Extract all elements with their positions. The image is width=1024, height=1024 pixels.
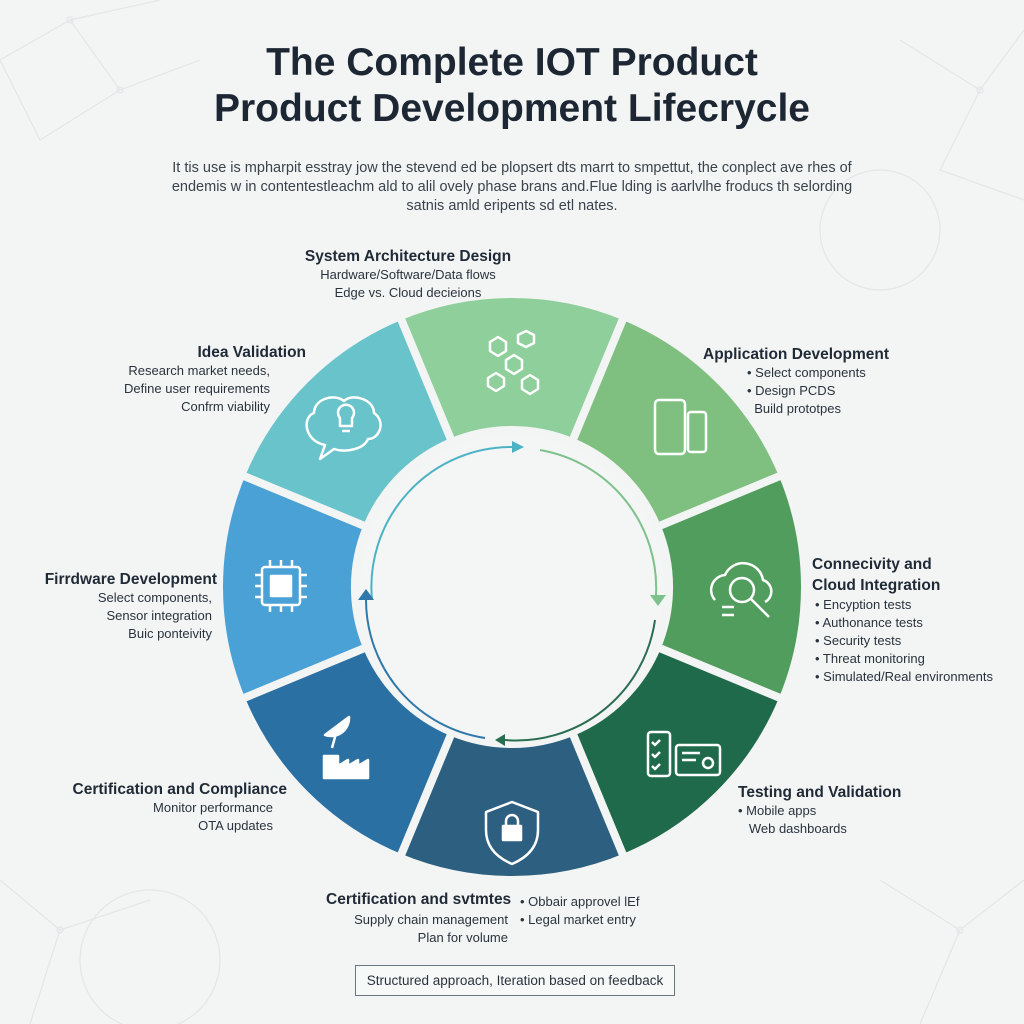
label: firmware: Select components, — [98, 590, 212, 605]
title: The Complete IOT Product — [266, 41, 758, 84]
label: connectivity: • Threat monitoring — [815, 651, 925, 666]
icon: idea cloud — [307, 397, 381, 459]
subtitle — [172, 160, 852, 214]
label: connectivity: • Security tests — [815, 633, 901, 648]
label: firmware: Sensor integration — [106, 608, 212, 623]
segment: system architecture — [400, 294, 624, 442]
label: firmware — [45, 571, 217, 641]
label: connectivity: • Simulated/Real environments — [815, 669, 993, 684]
text: Supply chain management — [354, 912, 508, 927]
segment: idea validation — [241, 316, 452, 527]
label: application development — [703, 346, 889, 416]
label: connectivity: Connecivity and — [812, 556, 932, 573]
text: • Legal market entry — [520, 912, 636, 927]
icon: shield — [486, 802, 538, 864]
label: application development: • Select components — [747, 365, 866, 380]
icon: cloud search — [711, 563, 771, 617]
segment: application development — [572, 316, 783, 527]
label: testing — [738, 784, 901, 836]
label: connectivity — [812, 556, 993, 684]
label: connectivity: • Encyption tests — [815, 597, 911, 612]
icon: satellite factory — [324, 717, 368, 778]
inner arrows — [366, 447, 656, 740]
icon: testing checklist — [648, 732, 720, 776]
segment: testing — [572, 647, 783, 858]
label: certification compliance — [73, 781, 287, 833]
label: application development: • Design PCDS — [747, 383, 835, 398]
label: certification compliance: Monitor performance — [153, 800, 273, 815]
label: firmware: Buic ponteivity — [128, 626, 212, 641]
icon: chip — [255, 560, 307, 612]
label: system architecture — [305, 248, 511, 300]
label: idea validation — [124, 344, 306, 414]
segment: certification compliance — [241, 647, 452, 858]
label: idea validation: Define user requirements — [124, 381, 270, 396]
label: idea validation: Research market needs, — [128, 363, 270, 378]
label: connectivity: • Authonance tests — [815, 615, 923, 630]
footer box: Structured approach, Iteration based on feedback — [367, 973, 663, 988]
label: certification compliance: OTA updates — [198, 818, 273, 833]
title — [214, 41, 810, 130]
label: idea validation: Idea Validation — [197, 344, 306, 361]
label: connectivity: Cloud Integration — [812, 577, 940, 594]
label: idea validation: Confrm viability — [181, 399, 270, 414]
label: system architecture: Edge vs. Cloud decieions — [335, 285, 481, 300]
text: • Obbair approvel lEf — [520, 894, 639, 909]
icons — [255, 331, 771, 864]
icon: phones — [655, 400, 706, 454]
subtitle: It tis use is mpharpit esstray jow the stevend ed be plopsert dts marrt to smpettut, the conplect ave rhes of — [172, 160, 852, 176]
label: application development: Build prototpes — [754, 401, 841, 416]
subtitle: endemis w in contentestleachm ald to alil ovely phase brans and.Flue lding is aarlvlhe froducs th selording — [172, 179, 852, 195]
label: application development: Application Development — [703, 346, 889, 363]
label: system architecture: System Architecture Design — [305, 248, 511, 265]
segment: certification bottom — [400, 732, 624, 880]
footer box — [355, 965, 675, 996]
label: testing: Web dashboards — [749, 821, 847, 836]
label: firmware: Firrdware Development — [45, 571, 217, 588]
label: certification compliance: Certification and Compliance — [73, 781, 287, 798]
label: testing: • Mobile apps — [738, 803, 816, 818]
text: Plan for volume — [418, 930, 508, 945]
segment: connectivity — [657, 475, 805, 699]
label: system architecture: Hardware/Software/Data flows — [320, 267, 496, 282]
icon: network blocks — [488, 331, 538, 394]
label: certification bottom: Certification and svtmtes — [326, 891, 511, 908]
title: Product Development Lifecrycle — [214, 87, 810, 130]
subtitle: satnis amld eripents sd etl nates. — [406, 198, 618, 214]
segment: firmware — [219, 475, 367, 699]
label: testing: Testing and Validation — [738, 784, 901, 801]
